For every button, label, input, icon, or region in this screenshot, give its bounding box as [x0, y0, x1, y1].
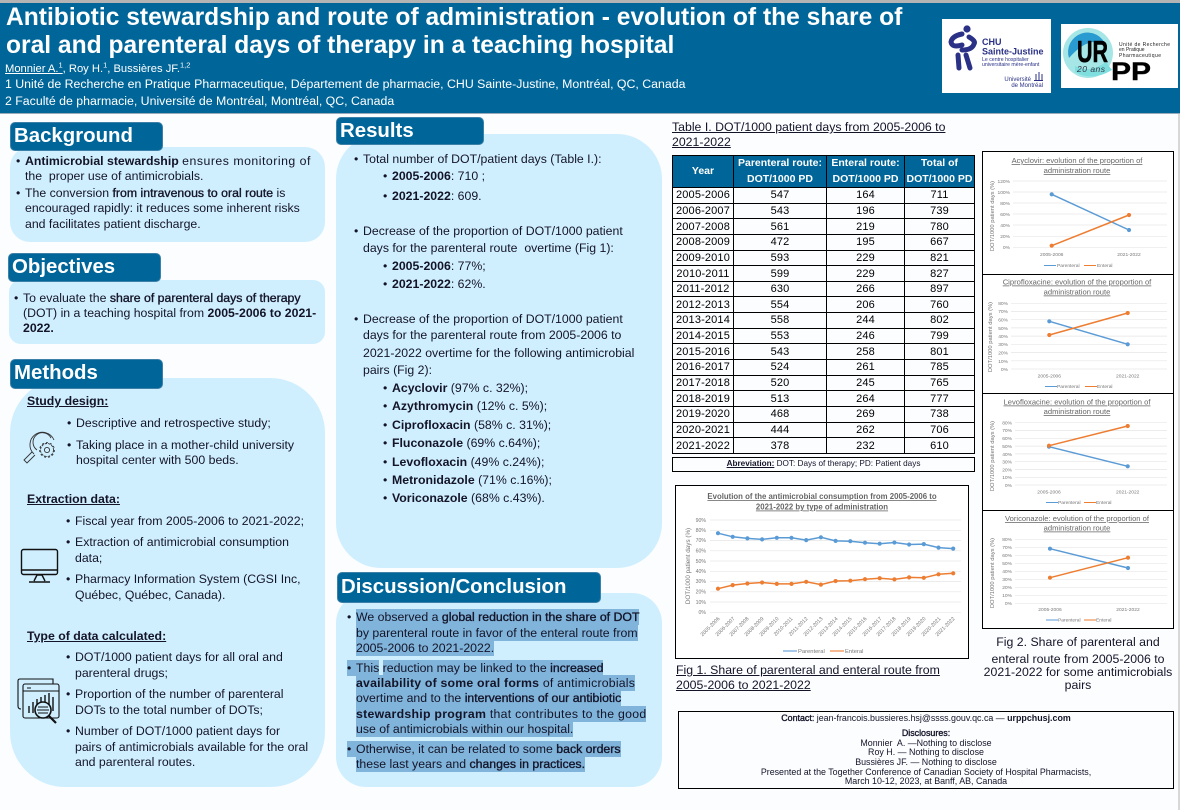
line chart: figure 1: 2015-2016 [847, 616, 868, 638]
table: DOT per 1000 patient days: 2018-2019 [676, 393, 730, 405]
table: DOT per 1000 patient days: 229 [856, 252, 875, 264]
table: DOT per 1000 patient days: 821 [930, 252, 949, 264]
line chart: levofloxacin: 0% [1005, 483, 1013, 489]
line chart: figure 1: 60% [696, 548, 706, 554]
subsection: type of data calculated: parenteral drugs; [75, 666, 168, 680]
table: DOT per 1000 patient days: 2016-2017 [676, 361, 730, 373]
text: discussion and conclusion: reduction may be linked to the increased [383, 661, 603, 675]
affiliations: 1 Unité de Recherche en Pratique Pharmaceutique, Département de pharmacie, CHU Sainte-Justine, Montréal, QC, Canada [5, 77, 685, 91]
line chart: voriconazole: Parenteral [1058, 618, 1081, 624]
logo: CHU Sainte-Justine: Le centre hospitalier [982, 57, 1029, 63]
logo: URPP: UR [1077, 34, 1108, 69]
text: results: pairs (Fig 2): [363, 363, 432, 377]
line chart: acyclovir: 120% [997, 179, 1011, 185]
line chart: ciprofloxacin: 60% [998, 318, 1009, 324]
text: objectives: To evaluate the share of parenteral days of therapy [23, 291, 301, 305]
table: DOT per 1000 patient days: 2020-2021 [676, 424, 730, 436]
logo: URPP: PP [1111, 58, 1151, 86]
line chart: levofloxacin: 20% [1002, 468, 1013, 474]
line chart: voriconazole: 0% [1005, 601, 1013, 607]
line chart: ciprofloxacin: 30% [998, 342, 1009, 348]
line chart: voriconazole: 50% [1002, 561, 1013, 567]
text: background: and facilitates patient discharge. [25, 217, 201, 231]
text: results: 2021-2022 overtime for the following antimicrobial [363, 346, 634, 360]
table: DOT per 1000 patient days: 739 [930, 205, 949, 217]
line chart: levofloxacin: 2005-2006 [1037, 490, 1061, 496]
line chart: ciprofloxacin: 50% [998, 326, 1009, 332]
table: DOT per 1000 patient days: 2005-2006 [676, 189, 730, 201]
line chart: voriconazole: 10% [1002, 593, 1013, 599]
line chart: figure 1: 2017-2018 [876, 616, 897, 638]
logo: CHU Sainte-Justine: universitaire mère-enfant [982, 62, 1040, 68]
table: DOT per 1000 patient days: 206 [856, 299, 875, 311]
table: DOT per 1000 patient days: 2017-2018 [676, 377, 730, 389]
text: discussion and conclusion: these last years and changes in practices. [356, 757, 585, 771]
line chart: acyclovir: 2021-2022 [1117, 252, 1141, 258]
text: results: Metronidazole (71% c.16%); [392, 473, 552, 487]
line chart: acyclovir: Enteral [1097, 263, 1112, 269]
line chart: levofloxacin: 10% [1002, 475, 1013, 481]
subsection: study design: Taking place in a mother-child university [76, 438, 294, 452]
subsection: study design [27, 394, 294, 467]
line chart: levofloxacin: 40% [1002, 452, 1013, 458]
line chart: figure 1: 2006-2007 [715, 616, 736, 638]
table: DOT per 1000 patient days: 780 [930, 221, 949, 233]
heading: results: Results [340, 120, 414, 142]
table: DOT per 1000 patient days: 765 [930, 377, 949, 389]
figure 1 caption: Fig 1. Share of parenteral and enteral route from [676, 663, 940, 677]
table: DOT per 1000 patient days: 195 [856, 236, 875, 248]
line chart: voriconazole: 70% [1002, 545, 1013, 551]
table: DOT per 1000 patient days: 667 [930, 236, 949, 248]
heading: background [10, 122, 163, 151]
text: background [16, 154, 311, 231]
subsection: extraction data: Extraction data: [27, 492, 120, 506]
table: DOT per 1000 patient days: 264 [856, 393, 875, 405]
line chart: ciprofloxacin: 2021-2022 [1116, 374, 1140, 380]
table: DOT per 1000 patient days: DOT/1000 PD [747, 172, 813, 184]
line chart: voriconazole [982, 511, 1174, 629]
line chart: ciprofloxacin: 80% [998, 301, 1009, 307]
subsection: study design: Study design: [27, 394, 108, 408]
line chart: levofloxacin [982, 394, 1174, 510]
text: discussion and conclusion: This [356, 661, 379, 675]
logo: CHU Sainte-Justine: Université [1004, 77, 1032, 83]
line chart: acyclovir: 2005-2006 [1040, 252, 1064, 258]
line chart: levofloxacin: 60% [1002, 436, 1013, 442]
table: DOT per 1000 patient days: 2008-2009 [676, 236, 730, 248]
table: DOT per 1000 patient days: 378 [771, 440, 789, 452]
table: DOT per 1000 patient days: 164 [856, 189, 875, 201]
line chart: acyclovir: 80% [1000, 201, 1011, 207]
line chart: figure 1: 40% [696, 569, 706, 575]
heading: objectives [8, 253, 161, 282]
table: DOT per 1000 patient days: 2009-2010 [676, 252, 730, 264]
table: DOT per 1000 patient days: 2015-2016 [676, 346, 730, 358]
text: discussion and conclusion: Otherwise, it can be related to some back orders [356, 742, 621, 756]
table: DOT per 1000 patient days: 245 [856, 377, 875, 389]
text: background: The conversion from intravenous to oral route is [25, 186, 285, 200]
text: results: Voriconazole (68% c.43%). [392, 491, 545, 505]
table: DOT per 1000 patient days: Year [692, 165, 714, 177]
panel: results [336, 117, 662, 568]
table: DOT per 1000 patient days: 802 [930, 314, 949, 326]
table: DOT per 1000 patient days: 472 [771, 236, 789, 248]
subsection: type of data calculated: Proportion of the number of parenteral [75, 687, 284, 701]
line chart: figure 1: 2020-2021 [921, 616, 942, 638]
text: results: Decrease of the proportion of DOT/1000 patient [363, 224, 623, 238]
text: results: 2005-2006: 77%; [392, 259, 486, 273]
text: results: 2005-2006: 710 ; [392, 169, 485, 183]
panel: background [10, 122, 325, 242]
subsection: type of data calculated: DOT/1000 patient days for all oral and [75, 650, 283, 664]
line chart: ciprofloxacin: Ciprofloxacine: evolution of the proportion of [1003, 278, 1152, 286]
text: discussion and conclusion: overtime and to the interventions of our antibiotic [356, 691, 621, 705]
line chart: acyclovir: DOT/1000 patient days (%) [990, 181, 996, 251]
subsection: study design: hospital center with 500 beds. [76, 453, 239, 467]
line chart: acyclovir: Parenteral [1057, 263, 1080, 269]
line chart: figure 1: 2016-2017 [862, 616, 883, 638]
text: discussion and conclusion: We observed a global reduction in the share of DOT [356, 610, 639, 624]
line chart: acyclovir: 0% [1003, 245, 1011, 251]
logo: CHU Sainte-Justine: de Montréal [1011, 83, 1043, 89]
table: DOT per 1000 patient days: 785 [930, 361, 949, 373]
line chart: voriconazole: Enteral [1096, 618, 1112, 624]
line chart: ciprofloxacin: 40% [998, 334, 1009, 340]
subsection: extraction data: Extraction of antimicrobial consumption [75, 535, 289, 549]
line chart: ciprofloxacin: 20% [998, 350, 1009, 356]
table: DOT per 1000 patient days: 444 [771, 424, 789, 436]
table: DOT per 1000 patient days: 2019-2020 [676, 408, 730, 420]
line chart: voriconazole: 30% [1002, 577, 1013, 583]
line chart: voriconazole: 40% [1002, 569, 1013, 575]
table: DOT per 1000 patient days: 2007-2008 [676, 221, 730, 233]
contact and disclosures box: Bussières JF. — Nothing to disclose [855, 757, 997, 767]
table: DOT per 1000 patient days: 2010-2011 [676, 268, 730, 280]
line chart: figure 1: Enteral [845, 649, 863, 655]
line chart: ciprofloxacin: Parenteral [1057, 384, 1080, 390]
logo: CHU Sainte-Justine: CHU [982, 37, 1002, 47]
subsection: extraction data: Fiscal year from 2005-2006 to 2021-2022; [75, 514, 304, 528]
line chart: levofloxacin: 50% [1002, 444, 1013, 450]
heading: discussion and conclusion: Discussion/Conclusion [341, 576, 566, 598]
subsection: extraction data: Québec, Québec, Canada). [75, 588, 225, 602]
line chart: ciprofloxacin: 2005-2006 [1038, 374, 1061, 380]
line chart: figure 1: 2009-2010 [759, 616, 780, 638]
figure 2 caption: pairs [1065, 678, 1091, 692]
subsection: type of data calculated [27, 629, 308, 769]
figure 2 caption: 2021-2022 for some antimicrobials [984, 665, 1172, 679]
subsection: type of data calculated: and parenteral routes. [75, 755, 195, 769]
line chart: figure 1: 0% [698, 610, 706, 616]
text: results: days for the parenteral route from 2005-2006 to [363, 328, 621, 342]
table abbreviation note: Abreviation: DOT: Days of therapy; PD: Patient days [727, 459, 920, 468]
heading: background: Background [14, 125, 133, 147]
line chart: ciprofloxacin: 10% [998, 359, 1009, 365]
line chart: figure 1: DOT/1000 patient days (%) [685, 528, 692, 604]
table: DOT per 1000 patient days: 524 [771, 361, 789, 373]
line chart: voriconazole: administration route [1044, 524, 1110, 532]
table: DOT per 1000 patient days: 558 [771, 314, 789, 326]
heading: methods [10, 359, 163, 389]
line chart: figure 1: 90% [696, 518, 706, 524]
figure 2 caption: Fig 2. Share of parenteral and [996, 635, 1160, 649]
subsection: study design: Descriptive and retrospective study; [76, 416, 271, 430]
line chart: voriconazole: 60% [1002, 553, 1013, 559]
logo: URPP: Unité de Recherche [1119, 42, 1170, 48]
line chart: figure 1: 2007-2008 [729, 616, 750, 638]
table: DOT per 1000 patient days: 738 [930, 408, 949, 420]
line chart: ciprofloxacin: Enteral [1097, 384, 1112, 390]
heading: methods: Methods [14, 362, 98, 384]
logo: URPP: en Pratique [1119, 47, 1145, 53]
text: discussion and conclusion: stewardship program that contributes to the good [356, 707, 646, 721]
table: DOT per 1000 patient days: 269 [856, 408, 875, 420]
contact and disclosures box: Roy H. — Nothing to disclose [868, 747, 984, 757]
logo: URPP [1061, 24, 1178, 88]
table: DOT per 1000 patient days [672, 155, 975, 454]
panel: objectives [8, 253, 325, 344]
line chart: voriconazole: Voriconazole: evolution of the proportion of [1005, 514, 1150, 523]
subsection: extraction data [27, 492, 304, 602]
logo: CHU Sainte-Justine [942, 19, 1051, 93]
line chart: figure 1 [675, 485, 969, 659]
line chart: figure 1: 2021-2022 [935, 616, 956, 638]
subsection: extraction data: data; [75, 551, 102, 565]
contact and disclosures box: Presented at the Together Conference of Canadian Society of Hospital Pharmacists, [761, 767, 1091, 777]
table: DOT per 1000 patient days: 711 [930, 189, 948, 201]
table: DOT per 1000 patient days: 599 [771, 268, 789, 280]
line chart: ciprofloxacin: administration route [1044, 288, 1110, 296]
logo: CHU Sainte-Justine: Sainte-Justine [982, 46, 1044, 56]
table: DOT per 1000 patient days: 246 [856, 330, 875, 342]
line chart: acyclovir: 40% [1000, 223, 1011, 229]
line chart: voriconazole: 80% [1002, 537, 1013, 543]
table abbreviation note [672, 457, 975, 472]
text: results: days for the parenteral route overtime (Fig 1): [363, 241, 614, 255]
line chart: levofloxacin: 70% [1002, 428, 1013, 434]
logo: URPP: Pharmaceutique [1119, 53, 1161, 59]
table: DOT per 1000 patient days: 258 [856, 346, 875, 358]
line chart: figure 1: 20% [696, 590, 706, 596]
text: discussion and conclusion: by parenteral route in favor of the enteral route from [356, 626, 638, 640]
subsection: extraction data: Pharmacy Information System (CGSI Inc, [75, 572, 301, 586]
text: background: encouraged rapidly: it reduces some inherent risks [25, 201, 300, 215]
table: DOT per 1000 patient days: 262 [856, 424, 875, 436]
line chart: ciprofloxacin: 70% [998, 309, 1009, 315]
table: DOT per 1000 patient days: DOT/1000 PD [833, 172, 898, 184]
table: DOT per 1000 patient days: 229 [856, 268, 875, 280]
text: results: Azythromycin (12% c. 5%); [392, 399, 547, 413]
panel: discussion and conclusion [336, 572, 662, 787]
line chart: figure 1: 50% [696, 559, 706, 565]
table: DOT per 1000 patient days: 547 [771, 189, 789, 201]
line chart: acyclovir: Acyclovir: evolution of the proportion of [1012, 156, 1143, 165]
table: DOT per 1000 patient days: 706 [930, 424, 949, 436]
text: results: Acyclovir (97% c. 32%); [392, 381, 528, 395]
text: results: Levofloxacin (49% c.24%); [392, 455, 544, 469]
text: results: 2021-2022: 62%. [392, 277, 486, 291]
text: discussion and conclusion: availability of some oral forms of antimicrobials [356, 676, 635, 690]
table: DOT per 1000 patient days: 520 [771, 377, 789, 389]
heading: objectives: Objectives [12, 256, 115, 278]
subsection: type of data calculated: DOTs to the total number of DOTs; [75, 703, 263, 717]
text: objectives: 2022. [23, 321, 54, 335]
icon: data analysis [17, 678, 60, 724]
line chart: levofloxacin: Enteral [1096, 500, 1112, 506]
table title [672, 120, 946, 148]
table: DOT per 1000 patient days: 801 [930, 346, 949, 358]
table: DOT per 1000 patient days: 610 [930, 440, 949, 452]
contact and disclosures box: Disclosures: [902, 728, 950, 738]
subsection: type of data calculated: Type of data calculated: [27, 629, 166, 643]
table: DOT per 1000 patient days: 543 [771, 346, 789, 358]
line chart: levofloxacin: DOT/1000 patient days (%) [990, 421, 996, 491]
line chart: ciprofloxacin [982, 275, 1174, 393]
line chart: figure 1: 10% [696, 600, 706, 606]
contact and disclosures box: Monnier A. —Nothing to disclose [860, 738, 992, 748]
line chart: figure 1: Parenteral [798, 649, 825, 655]
table: DOT per 1000 patient days: 261 [856, 361, 875, 373]
table: DOT per 1000 patient days: 513 [771, 393, 789, 405]
heading: discussion and conclusion [337, 572, 601, 603]
figure 1 caption: 2005-2006 to 2021-2022 [676, 678, 811, 692]
text: objectives [14, 291, 316, 335]
line chart: voriconazole: DOT/1000 patient days (%) [990, 538, 996, 608]
line chart: figure 1: 2008-2009 [744, 616, 765, 638]
heading: results [336, 117, 484, 145]
table: DOT per 1000 patient days: Enteral route: [831, 157, 900, 169]
table: DOT per 1000 patient days: 827 [930, 268, 949, 280]
table: DOT per 1000 patient days: Total of [921, 157, 958, 169]
table: DOT per 1000 patient days: 543 [771, 205, 789, 217]
text: results: 2021-2022: 609. [392, 189, 482, 203]
table: DOT per 1000 patient days: 799 [930, 330, 949, 342]
line chart: acyclovir [982, 151, 1174, 274]
table: DOT per 1000 patient days: 2011-2012 [676, 283, 730, 295]
line chart: levofloxacin: Parenteral [1058, 500, 1081, 506]
text: background: Antimicrobial stewardship ensures monitoring of [25, 154, 311, 168]
title: Antibiotic stewardship and route of administration - evolution of the share of [6, 4, 902, 31]
panel: methods [10, 359, 325, 787]
figure 1 caption [676, 663, 940, 692]
text: results [354, 152, 634, 505]
line chart: figure 1: 2013-2014 [818, 616, 839, 638]
table: DOT per 1000 patient days: DOT/1000 PD [907, 172, 972, 184]
line chart: ciprofloxacin: DOT/1000 patient days (%) [988, 302, 994, 372]
text: discussion and conclusion: 2005-2006 to 2021-2022. [356, 641, 494, 655]
line chart: levofloxacin: 30% [1002, 460, 1013, 466]
line chart: figure 1: 30% [696, 579, 706, 585]
table: DOT per 1000 patient days: 760 [930, 299, 949, 311]
line chart: acyclovir: 60% [1000, 212, 1011, 218]
line chart: acyclovir: 100% [997, 190, 1011, 196]
line chart: voriconazole: 2005-2006 [1038, 607, 1062, 613]
line chart: voriconazole: 20% [1002, 585, 1013, 591]
table: DOT per 1000 patient days: 2006-2007 [676, 205, 730, 217]
line chart: levofloxacin: administration route [1044, 407, 1110, 416]
contact and disclosures box [678, 711, 1174, 789]
line chart: figure 1: 2021-2022 by type of administration [756, 502, 888, 512]
affiliations [5, 77, 686, 108]
table: DOT per 1000 patient days: 2012-2013 [676, 299, 730, 311]
table: DOT per 1000 patient days: 897 [930, 283, 949, 295]
text: discussion and conclusion [347, 609, 646, 772]
line chart: figure 1: 2011-2012 [788, 616, 809, 638]
text: results: Ciprofloxacin (58% c. 31%); [392, 418, 551, 432]
figure 2 caption [984, 635, 1172, 692]
table: DOT per 1000 patient days: 2021-2022 [676, 440, 730, 452]
line chart: figure 1: 2012-2013 [803, 616, 824, 638]
line chart: figure 1: 2010-2011 [773, 616, 794, 638]
table: DOT per 1000 patient days: 244 [856, 314, 875, 326]
table: DOT per 1000 patient days: 468 [771, 408, 789, 420]
line chart: levofloxacin: 80% [1002, 420, 1013, 426]
table: DOT per 1000 patient days: 266 [856, 283, 875, 295]
authors: Monnier A.1, Roy H.1, Bussières JF.1,2 [5, 60, 190, 75]
line chart: figure 1: 80% [696, 528, 706, 534]
subsection: type of data calculated: pairs of antimicrobials available for the oral [75, 740, 308, 754]
contact and disclosures box: Contact: jean-francois.bussieres.hsj@ssss.gouv.qc.ca — urppchusj.com [781, 713, 1071, 723]
line chart: levofloxacin: 2021-2022 [1116, 490, 1140, 496]
text: results: Decrease of the proportion of DOT/1000 patient [363, 312, 623, 326]
table: DOT per 1000 patient days: 219 [856, 221, 875, 233]
line chart: figure 1: 2018-2019 [891, 616, 912, 638]
table: DOT per 1000 patient days: 561 [771, 221, 789, 233]
table: DOT per 1000 patient days: 232 [856, 440, 875, 452]
title: oral and parenteral days of therapy in a teaching hospital [6, 32, 674, 59]
table: DOT per 1000 patient days: 593 [771, 252, 789, 264]
line chart: acyclovir: administration route [1044, 166, 1110, 175]
line chart: figure 1: 70% [696, 538, 706, 544]
text: background: the proper use of antimicrobials. [25, 169, 203, 183]
icon: computer monitor [20, 548, 58, 583]
subsection: type of data calculated: Number of DOT/1000 patient days for [75, 724, 280, 738]
line chart: voriconazole: 2021-2022 [1116, 607, 1140, 613]
header banner [0, 3, 1180, 114]
table: DOT per 1000 patient days: 2014-2015 [676, 330, 730, 342]
affiliations: 2 Faculté de pharmacie, Université de Montréal, Montréal, QC, Canada [5, 94, 394, 108]
figure 2 caption: enteral route from 2005-2006 to [992, 652, 1164, 666]
table: DOT per 1000 patient days: 777 [930, 393, 949, 405]
text: discussion and conclusion: use of antimicrobials within our hospital. [356, 722, 573, 736]
line chart: figure 1: 2005-2006 [700, 616, 721, 638]
table title: 2021-2022 [672, 134, 731, 148]
text: results: Fluconazole (69% c.64%); [392, 436, 540, 450]
line chart: acyclovir: 20% [1000, 234, 1011, 240]
line chart: figure 1: Evolution of the antimicrobial consumption from 2005-2006 to [707, 492, 937, 501]
line chart: figure 1: 2019-2020 [906, 616, 927, 638]
table: DOT per 1000 patient days: 196 [856, 205, 875, 217]
line chart: levofloxacin: Levofloxacine: evolution of the proportion of [1004, 398, 1151, 406]
text: results: Total number of DOT/patient days (Table I.): [363, 152, 602, 166]
logo: URPP: 20 ans [1076, 64, 1106, 74]
table: DOT per 1000 patient days: 2013-2014 [676, 314, 730, 326]
icon: magnifier with gear [24, 432, 55, 464]
table: DOT per 1000 patient days: Parenteral route: [738, 157, 822, 169]
title [6, 4, 902, 59]
table: DOT per 1000 patient days: 554 [771, 299, 789, 311]
table title: Table I. DOT/1000 patient days from 2005-2006 to [672, 120, 945, 134]
line chart: figure 1: 2014-2015 [832, 616, 853, 638]
table: DOT per 1000 patient days: 553 [771, 330, 789, 342]
text: objectives: (DOT) in a teaching hospital from 2005-2006 to 2021- [23, 306, 316, 320]
table: DOT per 1000 patient days: 630 [771, 283, 789, 295]
line chart: ciprofloxacin: 0% [1001, 367, 1009, 373]
contact and disclosures box: March 10-12, 2023, at Banff, AB, Canada [845, 776, 1007, 786]
